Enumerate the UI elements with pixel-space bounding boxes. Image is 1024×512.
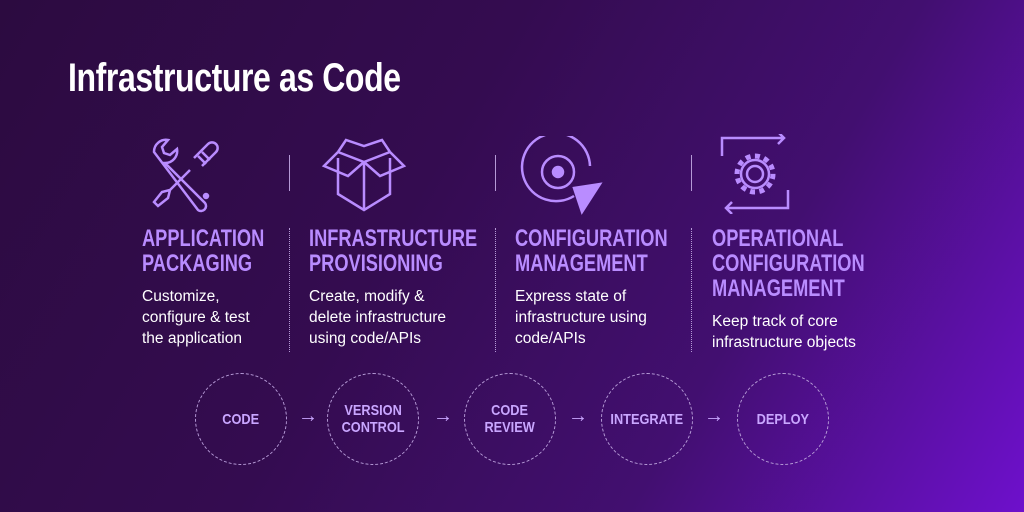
icon: box [322,138,406,212]
text: application packaging [142,288,250,347]
step: deploy: DEPLOY [757,410,809,428]
arrow: → [433,405,453,427]
icon: gear cycle [720,134,790,214]
dotted dividers [289,228,290,352]
text: operational configuration management: Keep track of core [712,313,838,330]
heading: configuration management: CONFIGURATION [515,225,668,252]
heading: operational configuration management: MANAGEMENT [712,275,845,302]
text: application packaging: configure & test [142,309,250,326]
text: configuration management [515,288,647,347]
text: infrastructure provisioning [309,288,446,347]
heading: configuration management: MANAGEMENT [515,250,648,277]
arrow: → [704,405,724,427]
text: infrastructure provisioning: Create, modify & [309,288,424,305]
heading: application packaging: PACKAGING [142,250,252,277]
step: code: CODE [223,410,259,428]
step: version control: VERSION [344,402,402,419]
heading: operational configuration management: CONFIGURATION [712,250,865,277]
icon: target [520,136,602,215]
step: code [195,373,287,465]
heading: operational configuration management [712,225,865,302]
step: version control: CONTROL [341,419,405,436]
text: infrastructure provisioning: using code/APIs [309,330,421,347]
heading: infrastructure provisioning: PROVISIONING [309,250,443,277]
heading: configuration management [515,225,668,277]
icon: tools [152,138,219,212]
heading: application packaging [142,225,264,277]
heading: infrastructure provisioning [309,225,477,277]
text: configuration management: code/APIs [515,330,586,347]
text: configuration management: Express state of [515,288,626,305]
arrow: → [298,405,318,427]
arrow: → [568,405,588,427]
step: integrate [601,373,693,465]
text: infrastructure provisioning: delete infrastructure [309,309,446,326]
heading: operational configuration management: OPERATIONAL [712,225,843,252]
text: configuration management: infrastructure using [515,309,647,326]
step: code review: CODE [492,402,528,419]
title: Infrastructure as Code [68,56,401,100]
divider [691,155,692,191]
heading: infrastructure provisioning: INFRASTRUCTURE [309,225,477,252]
step: version control [327,373,419,465]
step: integrate: INTEGRATE [611,410,683,428]
text: operational configuration management [712,313,856,351]
text: application packaging: Customize, [142,288,220,305]
heading: application packaging: APPLICATION [142,225,264,252]
divider [289,155,290,191]
step: code review: REVIEW [485,419,535,436]
divider [495,155,496,191]
text: operational configuration management: infrastructure objects [712,334,856,351]
step: code review [464,373,556,465]
step: deploy [737,373,829,465]
text: application packaging: the application [142,330,242,347]
